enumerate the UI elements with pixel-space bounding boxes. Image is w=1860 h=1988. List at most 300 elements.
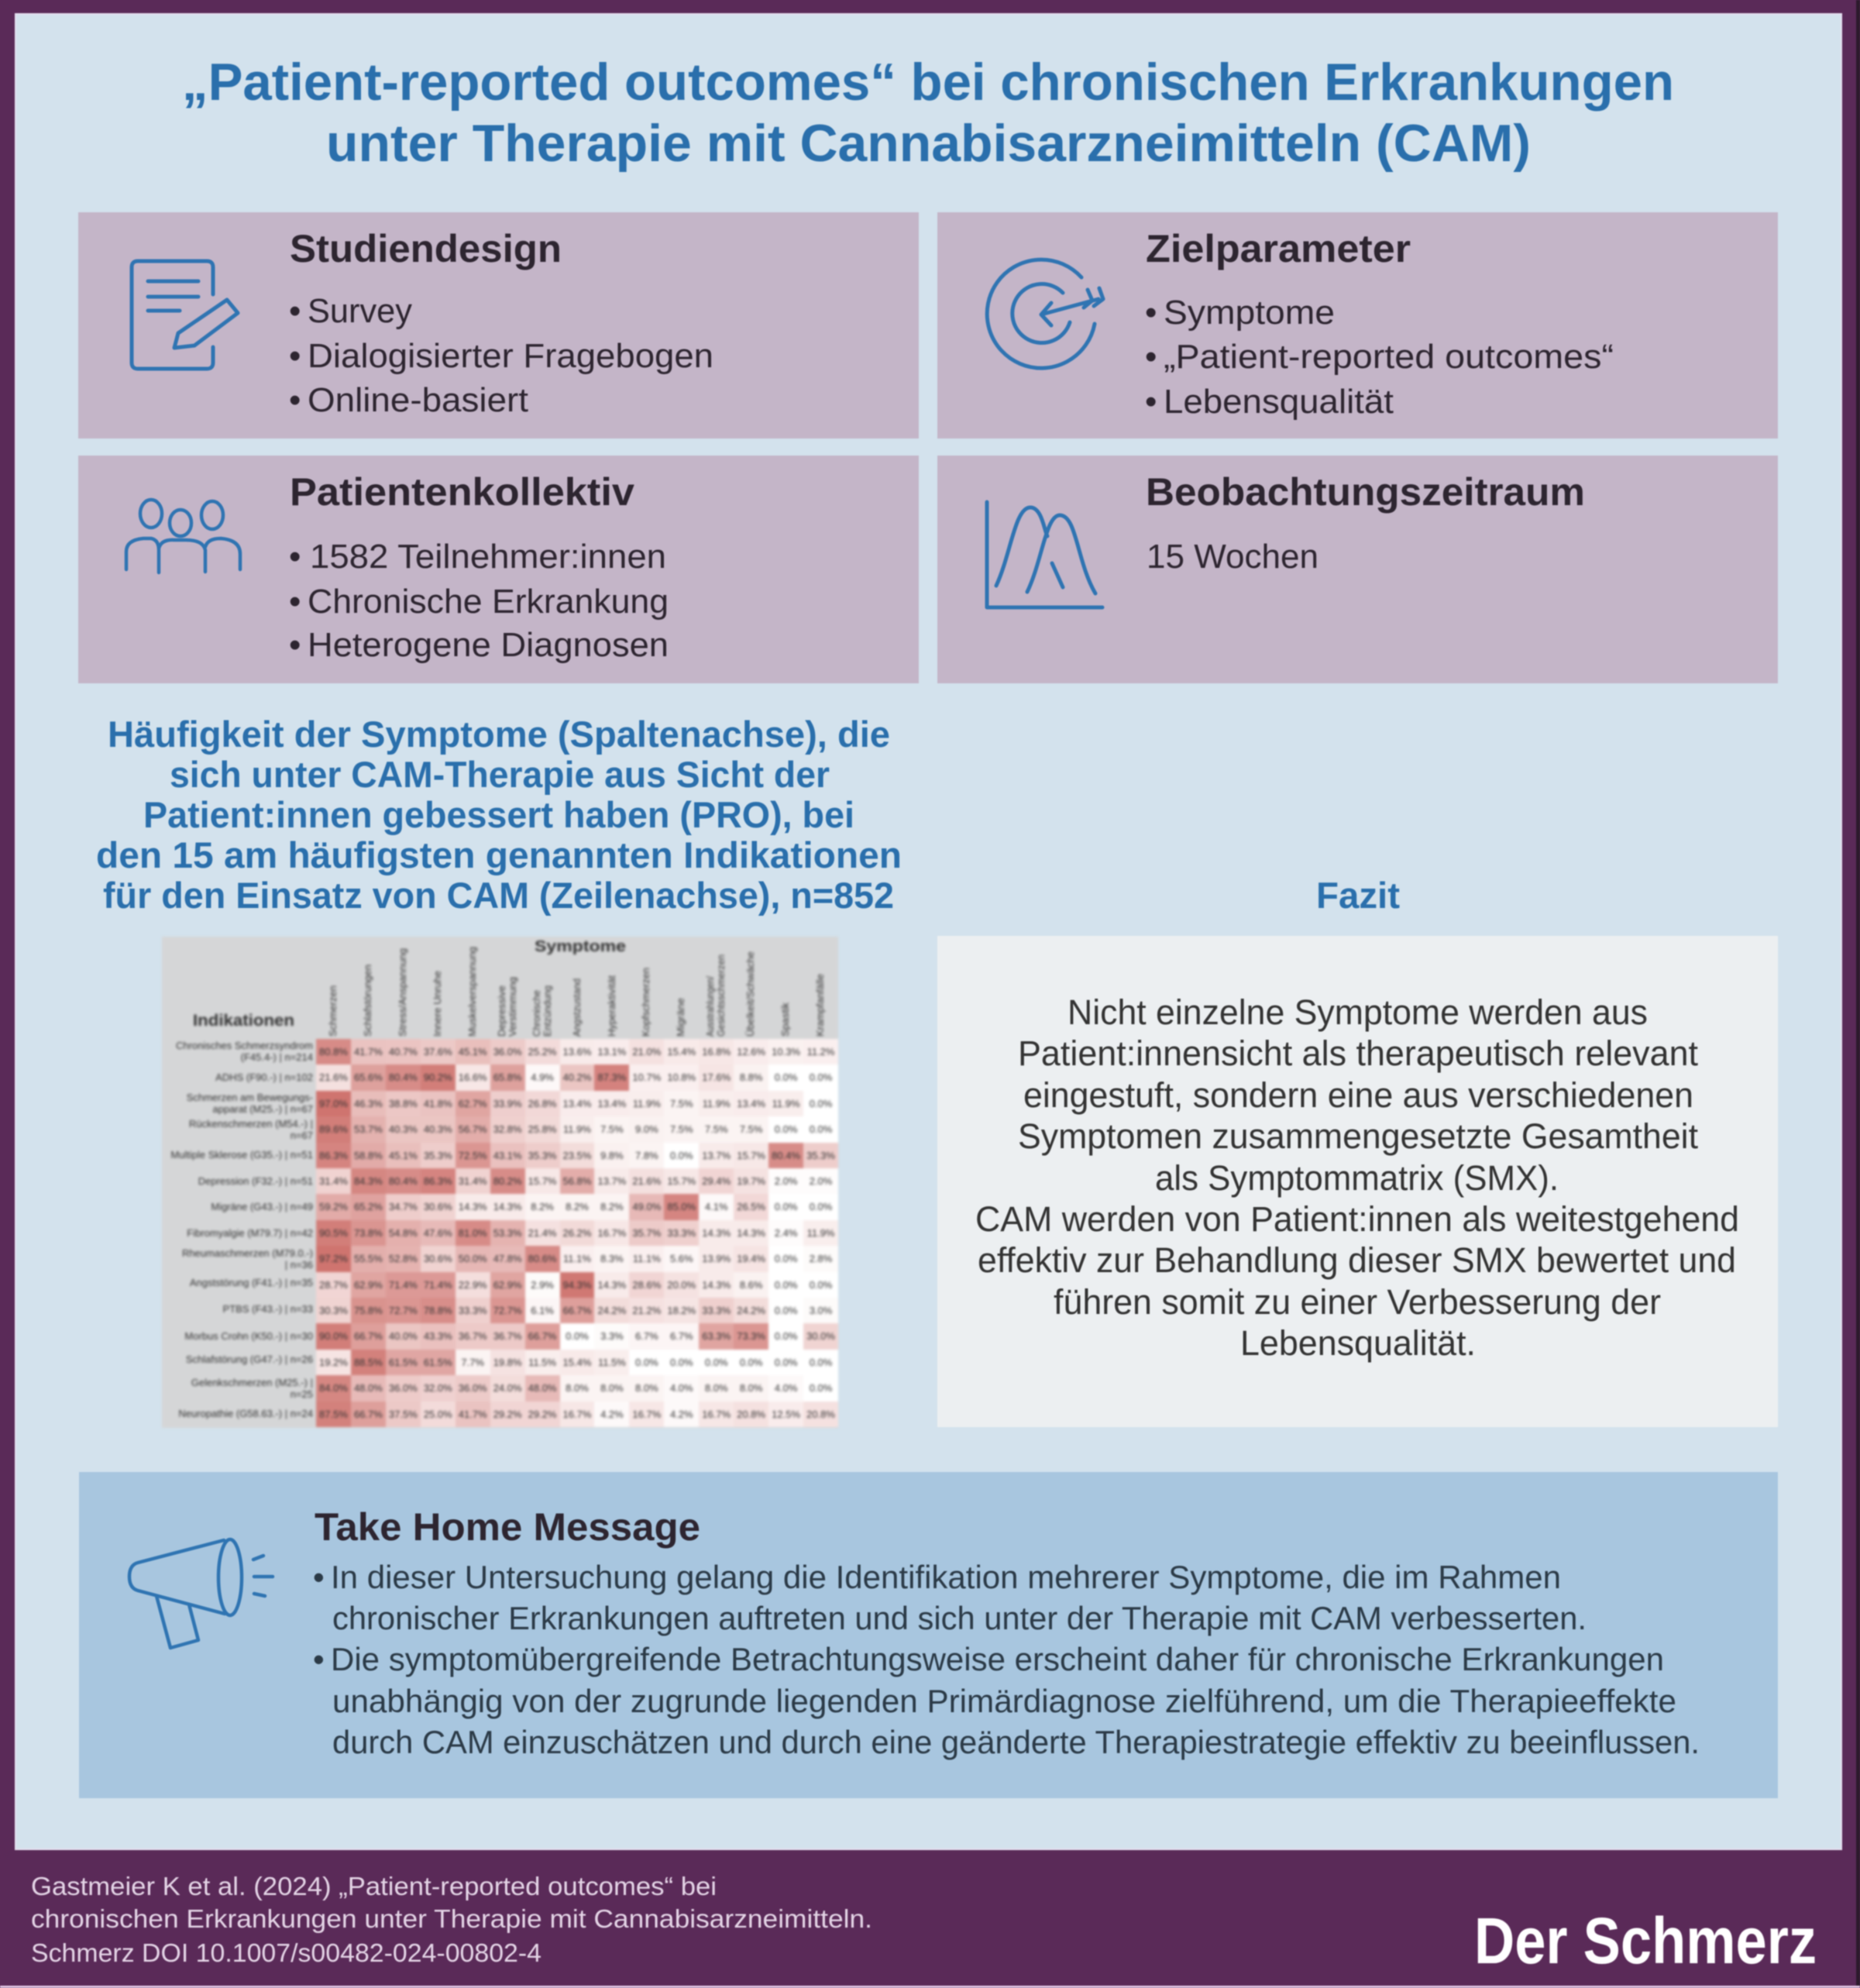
list: Studiendesign: Survey <box>308 292 412 330</box>
heatmap cells: 22.9% <box>459 1279 487 1291</box>
heatmap cells: 33.3% <box>667 1227 696 1239</box>
heading: Beobachtungszeitraum: Beobachtungszeitraum <box>1146 470 1585 514</box>
heatmap axis labels: apparat (M25.-) | n=67 <box>213 1103 313 1115</box>
heatmap cells: 28.7% <box>319 1279 348 1291</box>
heatmap cells: 11.9% <box>807 1227 834 1239</box>
heatmap cells <box>316 1039 838 1427</box>
list: Zielparameter <box>1145 294 1614 421</box>
heatmap axis labels: Indikationen <box>193 1012 294 1030</box>
heatmap cells: 13.7% <box>702 1150 731 1161</box>
heatmap cells: 48.0% <box>528 1382 556 1394</box>
heatmap axis labels: Innere Unruhe <box>431 971 443 1037</box>
heatmap axis labels <box>170 938 827 1420</box>
heatmap cells: 31.4% <box>319 1175 348 1187</box>
heading: heatmap description <box>96 714 902 916</box>
heatmap cells: 40.3% <box>424 1123 452 1135</box>
icon: megaphone <box>129 1539 273 1648</box>
heatmap cells: 8.0% <box>635 1382 658 1394</box>
heatmap cells: 36.0% <box>459 1382 487 1394</box>
heatmap cells: 14.3% <box>737 1227 765 1239</box>
heatmap cells: 15.4% <box>563 1357 591 1368</box>
heatmap cells: 49.0% <box>632 1201 661 1212</box>
heatmap cells: 0.0% <box>810 1279 832 1291</box>
heatmap axis labels: Schlafstörung (G47.-) | n=26 <box>186 1353 313 1365</box>
heatmap cells: 15.7% <box>737 1150 765 1161</box>
heatmap axis labels: Multiple Sklerose (G35.-) | n=51 <box>170 1149 313 1161</box>
heatmap axis labels: Angststörung (F41.-) | n=35 <box>190 1277 313 1288</box>
list: Studiendesign: Online-basiert <box>308 381 528 419</box>
heatmap cells: 13.6% <box>563 1046 591 1058</box>
heatmap cells: 40.3% <box>389 1123 418 1135</box>
heatmap axis labels: Angstzustand <box>571 979 583 1037</box>
heading: Fazit: Fazit <box>1316 875 1400 916</box>
heatmap cells: 0.0% <box>810 1098 832 1109</box>
panel: Take Home Message <box>79 1472 1778 1798</box>
heatmap cells: 29.4% <box>702 1175 731 1187</box>
heatmap cells: 53.3% <box>493 1227 522 1239</box>
heatmap cells: 9.8% <box>600 1150 624 1161</box>
heatmap cells: 84.3% <box>354 1175 383 1187</box>
heatmap cells: 90.5% <box>319 1227 348 1239</box>
heatmap cells: 6.7% <box>670 1330 693 1342</box>
citation <box>31 1872 872 1967</box>
heatmap cells: 17.6% <box>702 1071 731 1083</box>
heatmap cells: 33.3% <box>702 1305 731 1316</box>
heatmap cells: 38.8% <box>389 1098 418 1109</box>
heatmap axis labels: Muskelverspannung <box>466 947 478 1037</box>
heatmap cells: 48.0% <box>354 1382 383 1394</box>
citation: Schmerz DOI 10.1007/s00482-024-00802-4 <box>31 1938 541 1967</box>
list: Studiendesign: • <box>289 292 301 330</box>
heatmap cells: 35.3% <box>424 1150 452 1161</box>
heatmap cells: 66.7% <box>563 1305 591 1316</box>
heatmap cells: 40.0% <box>389 1330 418 1342</box>
heatmap cells: 36.0% <box>389 1382 418 1394</box>
heatmap cells: 9.0% <box>635 1123 658 1135</box>
heatmap cells: 61.5% <box>389 1357 418 1368</box>
heatmap cells: 55.5% <box>354 1253 383 1264</box>
heatmap cells: 33.3% <box>459 1305 487 1316</box>
panel: Studiendesign <box>78 212 919 439</box>
icon: distribution curves <box>987 502 1102 607</box>
heatmap axis labels: Gesichtsschmerzen <box>715 954 727 1037</box>
heatmap cells: 15.4% <box>667 1046 696 1058</box>
text: take home bullets: Die symptomübergreifende Betrachtungsweise erscheint daher für chronische Erkrankungen <box>331 1641 1664 1677</box>
heatmap cells: 30.3% <box>319 1305 348 1316</box>
heading: Patientenkollektiv: Patientenkollektiv <box>290 470 634 514</box>
icon: document with pen <box>132 261 238 369</box>
icon: group of people <box>126 500 240 573</box>
heatmap cells: 7.7% <box>461 1357 484 1368</box>
heatmap cells: 0.0% <box>670 1150 693 1161</box>
list: Studiendesign: Dialogisierter Fragebogen <box>308 337 713 375</box>
panel: Fazit <box>937 936 1778 1427</box>
heatmap cells: 43.1% <box>493 1150 522 1161</box>
list: Patientenkollektiv: 1582 Teilnehmer:innen <box>310 538 666 576</box>
heatmap axis labels: Spastik <box>779 1002 791 1037</box>
heatmap cells: 90.2% <box>424 1071 452 1083</box>
list: Patientenkollektiv <box>289 538 669 664</box>
heatmap cells: 10.8% <box>667 1071 696 1083</box>
text: take home bullets: durch CAM einzuschätzen und durch eine geänderte Therapiestrategie effektiv zu beeinflussen. <box>332 1724 1700 1760</box>
heatmap cells: 36.7% <box>493 1330 522 1342</box>
list: Zielparameter: Symptome <box>1164 294 1335 332</box>
heatmap cells: 21.6% <box>319 1071 348 1083</box>
list: Zielparameter: • <box>1145 338 1157 376</box>
heatmap cells: 37.6% <box>424 1046 452 1058</box>
heatmap axis labels: ADHS (F90.-) | n=102 <box>215 1071 313 1083</box>
heatmap axis labels: Krampfanfälle <box>814 974 826 1037</box>
heatmap cells: 71.4% <box>424 1279 452 1291</box>
heatmap cells: 0.0% <box>775 1201 797 1212</box>
heatmap cells: 13.9% <box>702 1253 731 1264</box>
text: Fazit <box>975 992 1739 1363</box>
heatmap axis labels: Fibromyalgie (M79.7) | n=42 <box>187 1227 313 1239</box>
heatmap cells: 41.8% <box>424 1098 452 1109</box>
heatmap cells: 14.3% <box>493 1201 522 1212</box>
heatmap cells: 73.3% <box>737 1330 765 1342</box>
heatmap axis labels: Neuropathie (G58.63.-) | n=24 <box>178 1408 313 1419</box>
heatmap cells: 0.0% <box>775 1253 797 1264</box>
heatmap cells: 0.0% <box>740 1357 762 1368</box>
heatmap cells: 80.4% <box>772 1150 800 1161</box>
heatmap axis labels: Depression (F32.-) | n=51 <box>198 1175 313 1187</box>
heatmap cells: 0.0% <box>775 1123 797 1135</box>
heatmap cells: 84.0% <box>319 1382 348 1394</box>
heatmap cells: 24.0% <box>493 1382 522 1394</box>
heatmap cells: 19.4% <box>737 1253 765 1264</box>
heatmap cells: 2.0% <box>775 1175 797 1187</box>
heatmap cells: 40.7% <box>389 1046 418 1058</box>
heatmap axis labels: Gelenkschmerzen (M25.-) | <box>191 1377 313 1388</box>
text: Fazit: Lebensqualität. <box>1240 1323 1476 1363</box>
heatmap cells: 30.0% <box>806 1330 835 1342</box>
heatmap cells: 87.3% <box>597 1071 626 1083</box>
heatmap cells: 86.3% <box>424 1175 452 1187</box>
heatmap cells: 4.0% <box>775 1382 797 1394</box>
heatmap cells: 20.8% <box>737 1408 765 1420</box>
heatmap cells: 56.7% <box>459 1123 487 1135</box>
heatmap cells: 21.6% <box>632 1175 661 1187</box>
heatmap cells: 21.4% <box>528 1227 556 1239</box>
heatmap cells: 7.5% <box>670 1123 693 1135</box>
citation: Gastmeier K et al. (2024) „Patient-reported outcomes“ bei <box>31 1872 717 1900</box>
heatmap cells: 86.3% <box>319 1150 348 1161</box>
panel: Beobachtungszeitraum <box>937 456 1778 683</box>
heatmap axis labels: PTBS (F43.-) | n=33 <box>223 1303 313 1315</box>
panel: Patientenkollektiv <box>78 456 919 683</box>
text: Fazit: effektiv zur Behandlung dieser SMX bewertet und <box>978 1240 1736 1280</box>
heatmap chart: symptoms by indication <box>162 937 838 1428</box>
heatmap cells: 7.8% <box>635 1150 658 1161</box>
heatmap cells: 29.2% <box>493 1408 522 1420</box>
heatmap cells: 24.2% <box>737 1305 765 1316</box>
heatmap cells: 90.0% <box>319 1330 348 1342</box>
heatmap axis labels: Symptome <box>535 938 626 955</box>
heatmap cells: 66.7% <box>528 1330 556 1342</box>
heatmap axis labels: n=67 <box>291 1130 313 1141</box>
heatmap cells: 28.6% <box>632 1279 661 1291</box>
heatmap cells: 0.0% <box>775 1305 797 1316</box>
heatmap cells: 4.2% <box>600 1408 624 1420</box>
heatmap cells: 18.2% <box>667 1305 696 1316</box>
heatmap cells: 23.5% <box>563 1150 591 1161</box>
heatmap cells: 21.0% <box>632 1046 661 1058</box>
heatmap cells: 6.7% <box>635 1330 658 1342</box>
heatmap cells: 0.0% <box>775 1279 797 1291</box>
heatmap cells: 29.2% <box>528 1408 556 1420</box>
heatmap cells: 88.5% <box>354 1357 383 1368</box>
heatmap axis labels: Chronisches Schmerzsyndrom <box>176 1040 313 1051</box>
list: Zielparameter: „Patient-reported outcomes“ <box>1164 338 1614 376</box>
list: Patientenkollektiv: Heterogene Diagnosen <box>308 626 669 664</box>
list: Studiendesign <box>289 292 713 419</box>
text: Fazit: als Symptommatrix (SMX). <box>1155 1158 1559 1198</box>
icon: target with arrow <box>987 260 1103 368</box>
heatmap cells: 35.7% <box>632 1227 661 1239</box>
heatmap cells: 20.8% <box>806 1408 835 1420</box>
heatmap cells: 26.2% <box>563 1227 591 1239</box>
heatmap cells: 87.5% <box>319 1408 348 1420</box>
heatmap cells: 80.4% <box>389 1175 418 1187</box>
heatmap cells: 11.1% <box>633 1253 661 1264</box>
text: take home bullets: unabhängig von der zugrunde liegenden Primärdiagnose zielführend, um die Therapieeffekte <box>332 1683 1676 1719</box>
heatmap cells: 19.8% <box>493 1357 522 1368</box>
heatmap cells: 43.3% <box>424 1330 452 1342</box>
heatmap cells: 73.8% <box>354 1227 383 1239</box>
heatmap cells: 19.2% <box>319 1357 348 1368</box>
heatmap cells: 3.3% <box>600 1330 624 1342</box>
heatmap cells: 8.0% <box>600 1382 624 1394</box>
heatmap axis labels: Chronische <box>531 990 542 1037</box>
text: 15 Wochen: 15 Wochen <box>1147 538 1319 576</box>
heatmap cells: 30.6% <box>424 1201 452 1212</box>
heatmap cells: 31.4% <box>459 1175 487 1187</box>
heatmap cells: 0.0% <box>810 1071 832 1083</box>
heatmap cells: 30.6% <box>424 1253 452 1264</box>
heatmap cells: 34.7% <box>389 1201 418 1212</box>
heatmap cells: 25.8% <box>528 1123 556 1135</box>
citation: chronischen Erkrankungen unter Therapie mit Cannabisarzneimitteln. <box>31 1904 872 1933</box>
heatmap cells: 4.1% <box>705 1201 728 1212</box>
heatmap cells: 0.0% <box>775 1357 797 1368</box>
heatmap cells: 7.5% <box>670 1098 693 1109</box>
heatmap cells: 41.7% <box>459 1408 487 1420</box>
heatmap axis labels: Migräne <box>675 998 686 1037</box>
heatmap cells: 0.0% <box>566 1330 589 1342</box>
heatmap cells: 66.7% <box>354 1408 383 1420</box>
heatmap cells: 26.5% <box>737 1201 765 1212</box>
heatmap cells: 2.9% <box>531 1279 554 1291</box>
heatmap cells: 0.0% <box>810 1201 832 1212</box>
heatmap cells: 8.0% <box>740 1382 762 1394</box>
heatmap cells: 21.2% <box>632 1305 661 1316</box>
text: take home bullets: • <box>313 1559 325 1595</box>
heatmap cells: 8.2% <box>566 1201 589 1212</box>
heatmap cells: 11.5% <box>598 1357 626 1368</box>
heatmap cells: 63.3% <box>702 1330 731 1342</box>
heatmap cells: 15.7% <box>667 1175 696 1187</box>
heatmap cells: 85.0% <box>667 1201 696 1212</box>
text: take home bullets <box>313 1559 1700 1760</box>
heatmap cells: 4.0% <box>670 1382 693 1394</box>
heatmap cells: 15.7% <box>528 1175 556 1187</box>
heatmap cells: 0.0% <box>705 1357 728 1368</box>
heatmap cells: 47.8% <box>493 1253 522 1264</box>
heading: heatmap description: Häufigkeit der Symptome (Spaltenachse), die <box>108 714 890 755</box>
heatmap cells: 13.7% <box>597 1175 626 1187</box>
heatmap cells: 66.7% <box>354 1330 383 1342</box>
heading: heatmap description: für den Einsatz von CAM (Zeilenachse), n=852 <box>103 875 894 916</box>
heatmap axis labels: Entzündung <box>541 985 553 1037</box>
heatmap cells: 37.5% <box>389 1408 418 1420</box>
heatmap cells: 11.9% <box>703 1098 731 1109</box>
heading: Studiendesign: Studiendesign <box>290 227 562 270</box>
heatmap cells: 16.8% <box>702 1046 731 1058</box>
heatmap cells: 26.8% <box>528 1098 556 1109</box>
list: Zielparameter: • <box>1145 294 1157 332</box>
title: „Patient-reported outcomes“ bei chronischen Erkrankungen <box>182 53 1674 112</box>
heatmap cells: 71.4% <box>389 1279 418 1291</box>
heatmap cells: 61.5% <box>424 1357 452 1368</box>
text: take home bullets: In dieser Untersuchung gelang die Identifikation mehrerer Symptome, die im Rahmen <box>331 1559 1561 1595</box>
heatmap cells: 40.2% <box>563 1071 591 1083</box>
heatmap axis labels: Rückenschmerzen (M54.-) | <box>189 1118 313 1130</box>
heatmap cells: 65.6% <box>354 1071 383 1083</box>
heatmap cells: 14.3% <box>702 1227 731 1239</box>
heatmap cells: 8.0% <box>566 1382 589 1394</box>
heatmap cells: 16.7% <box>563 1408 591 1420</box>
heatmap cells: 78.8% <box>424 1305 452 1316</box>
heatmap cells: 5.6% <box>670 1253 693 1264</box>
text: Fazit: Nicht einzelne Symptome werden aus <box>1068 992 1648 1032</box>
heatmap cells: 94.3% <box>563 1279 591 1291</box>
heading: heatmap description: sich unter CAM-Therapie aus Sicht der <box>170 754 830 795</box>
list: Zielparameter: Lebensqualität <box>1164 383 1394 421</box>
heatmap cells: 16.7% <box>632 1408 661 1420</box>
heatmap axis labels: Depressive <box>496 985 507 1037</box>
heatmap cells: 80.8% <box>319 1046 348 1058</box>
heatmap cells: 11.1% <box>563 1253 591 1264</box>
heatmap cells: 58.8% <box>354 1150 383 1161</box>
heatmap axis labels: Morbus Crohn (K50.-) | n=30 <box>184 1330 313 1342</box>
heatmap cells: 0.0% <box>775 1071 797 1083</box>
list: Patientenkollektiv: • <box>289 583 301 621</box>
heatmap cells: 11.5% <box>528 1357 556 1368</box>
heatmap cells: 7.5% <box>740 1123 762 1135</box>
heatmap cells: 13.4% <box>597 1098 626 1109</box>
heatmap cells: 25.2% <box>528 1046 556 1058</box>
heading: Zielparameter: Zielparameter <box>1146 227 1411 270</box>
heatmap cells: 62.9% <box>354 1279 383 1291</box>
heatmap cells: 7.5% <box>600 1123 624 1135</box>
heatmap axis labels: Schlafstörungen <box>362 965 373 1037</box>
heatmap cells: 13.4% <box>737 1098 765 1109</box>
heatmap cells: 52.8% <box>389 1253 418 1264</box>
heatmap cells: 89.6% <box>319 1123 348 1135</box>
text: Fazit: führen somit zu einer Verbesserung der <box>1054 1282 1661 1322</box>
heatmap cells: 10.7% <box>632 1071 661 1083</box>
heatmap cells: 11.9% <box>633 1098 661 1109</box>
heatmap cells: 53.7% <box>354 1123 383 1135</box>
title: unter Therapie mit Cannabisarzneimitteln (CAM) <box>326 114 1531 173</box>
heatmap axis labels: Stress/Anspannung <box>397 948 408 1037</box>
text: Fazit: eingestuft, sondern eine aus verschiedenen <box>1023 1075 1693 1115</box>
heatmap cells: 72.5% <box>459 1150 487 1161</box>
heatmap cells: 32.0% <box>424 1382 452 1394</box>
heatmap cells: 14.3% <box>597 1279 626 1291</box>
heatmap cells: 0.0% <box>810 1357 832 1368</box>
text: Fazit: Patient:innensicht als therapeutisch relevant <box>1018 1034 1698 1073</box>
heatmap axis labels: Migräne (G43.-) | n=49 <box>211 1201 313 1212</box>
heatmap cells: 54.8% <box>389 1227 418 1239</box>
heatmap cells: 36.7% <box>459 1330 487 1342</box>
heatmap cells: 62.9% <box>493 1279 522 1291</box>
heatmap cells: 8.3% <box>600 1253 624 1264</box>
heatmap cells: 6.1% <box>531 1305 554 1316</box>
heatmap cells: 19.7% <box>737 1175 765 1187</box>
heatmap cells: 7.5% <box>705 1123 728 1135</box>
heatmap cells: 75.8% <box>354 1305 383 1316</box>
heatmap axis labels: (F45.4-) | n=214 <box>241 1051 313 1063</box>
title <box>182 53 1674 173</box>
heatmap cells: 13.4% <box>563 1098 591 1109</box>
heatmap cells: 36.0% <box>493 1046 522 1058</box>
heatmap cells: 2.8% <box>810 1253 832 1264</box>
heatmap axis labels: Ausstrahlungen/ <box>704 976 716 1037</box>
heatmap cells: 62.7% <box>459 1098 487 1109</box>
heatmap cells: 8.2% <box>531 1201 554 1212</box>
heatmap cells: 0.0% <box>670 1357 693 1368</box>
heatmap cells: 13.1% <box>597 1046 626 1058</box>
heatmap cells: 2.0% <box>810 1175 832 1187</box>
heatmap cells: 97.0% <box>319 1098 348 1109</box>
heatmap cells: 0.0% <box>775 1330 797 1342</box>
heatmap cells: 11.9% <box>563 1123 591 1135</box>
heatmap cells: 45.1% <box>389 1150 418 1161</box>
heatmap cells: 80.2% <box>493 1175 522 1187</box>
heatmap axis labels: Übelkeit/Schwäche <box>744 951 756 1037</box>
heatmap cells: 47.6% <box>424 1227 452 1239</box>
heatmap cells: 80.4% <box>389 1071 418 1083</box>
list: Zielparameter: • <box>1145 383 1157 421</box>
heatmap cells: 32.8% <box>493 1123 522 1135</box>
heatmap axis labels: Kopfschmerzen <box>640 968 652 1037</box>
heatmap cells: 72.7% <box>493 1305 522 1316</box>
heatmap cells: 11.2% <box>807 1046 834 1058</box>
text: take home bullets: • <box>313 1641 325 1677</box>
heatmap cells: 3.0% <box>810 1305 832 1316</box>
heatmap cells: 0.0% <box>810 1123 832 1135</box>
heatmap cells: 45.1% <box>459 1046 487 1058</box>
heatmap cells: 20.0% <box>667 1279 696 1291</box>
heatmap cells: 16.7% <box>702 1408 731 1420</box>
list: Studiendesign: • <box>289 381 301 419</box>
heatmap cells: 72.7% <box>389 1305 418 1316</box>
heatmap cells: 59.2% <box>319 1201 348 1212</box>
heatmap cells: 46.3% <box>354 1098 383 1109</box>
heatmap cells: 10.3% <box>772 1046 800 1058</box>
heatmap cells: 8.0% <box>705 1382 728 1394</box>
text: Fazit: Symptomen zusammengesetzte Gesamtheit <box>1018 1116 1698 1156</box>
heatmap cells: 8.6% <box>740 1279 762 1291</box>
heatmap cells: 2.4% <box>775 1227 797 1239</box>
heatmap cells: 8.2% <box>600 1201 624 1212</box>
heading: heatmap description: den 15 am häufigsten genannten Indikationen <box>96 834 902 875</box>
list: Patientenkollektiv: • <box>289 626 301 664</box>
heatmap cells: 56.8% <box>563 1175 591 1187</box>
heatmap cells: 0.0% <box>635 1357 658 1368</box>
